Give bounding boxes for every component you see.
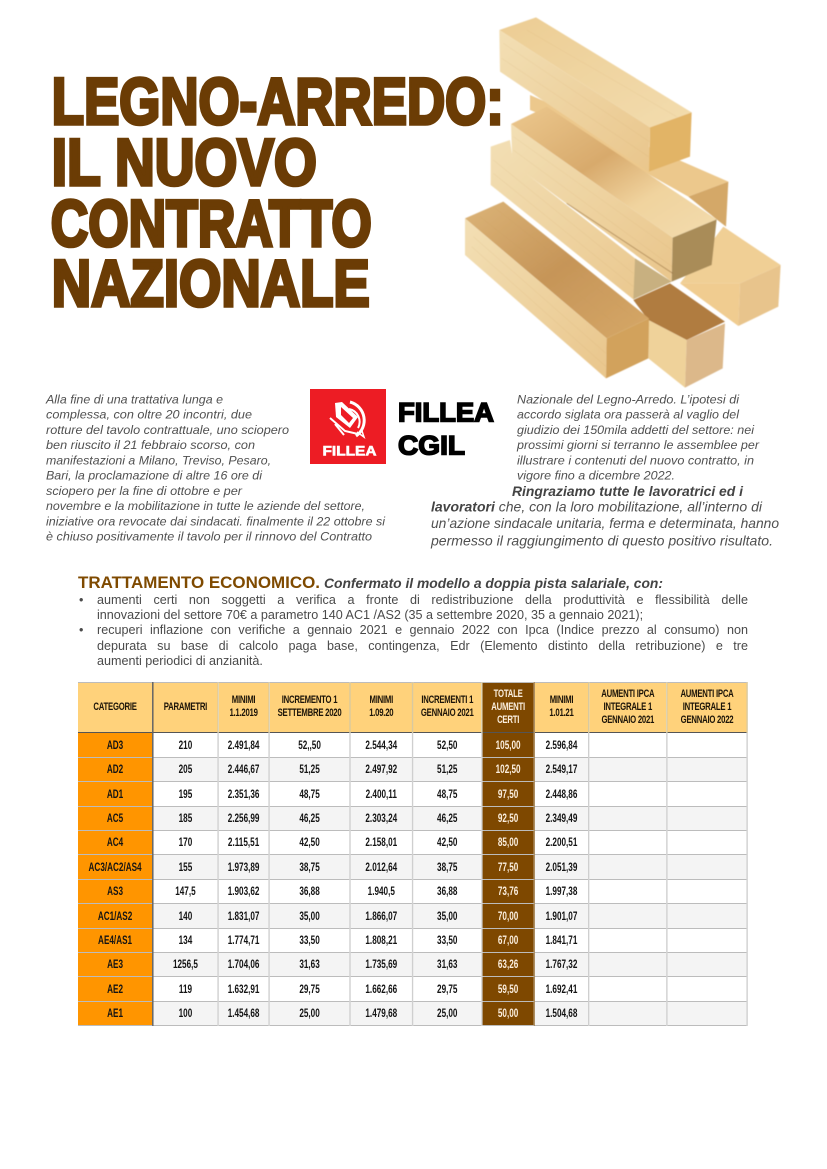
bullet list: innovazioni del settore 70€ a parametro 140 AC1 /AS2 (35 a settembre 2020, 35 a gennaio 2021);: [97, 608, 643, 622]
intro text: right column: lavoratori che, con la loro mobilitazione, all’interno di: [431, 500, 763, 515]
row AC5: 185: [179, 811, 192, 825]
row AS3: 1.903,62: [228, 884, 259, 898]
row AC5: 2.256,99: [228, 811, 259, 825]
row AE2: 59,50: [498, 982, 518, 996]
row AE4/AS1: [78, 929, 578, 952]
row AD3: 2.544,34: [365, 738, 397, 752]
row AC5: 2.349,49: [546, 811, 577, 825]
table header: GENNAIO 2021: [421, 707, 474, 719]
table header: CATEGORIE: [93, 700, 137, 712]
row AD2: 51,25: [299, 762, 320, 776]
row AC4: 170: [179, 835, 192, 849]
table header: MINIMI: [232, 694, 255, 706]
row AC4: 2.158,01: [365, 835, 397, 849]
intro text: right column: accordo siglata ora passerà al vaglio del: [517, 408, 739, 422]
intro text: right column: [430, 393, 779, 548]
table header: PARAMETRI: [164, 700, 207, 712]
row AC1/AS2: AC1/AS2: [98, 908, 132, 922]
title: [51, 64, 504, 320]
intro text: left column: iniziative ora revocate dai sindacati. finalmente il 22 ottobre si: [46, 515, 385, 528]
row AD1: 2.351,36: [228, 786, 259, 800]
row AE3: 31,63: [437, 957, 457, 971]
row AE3: 31,63: [299, 957, 320, 971]
row AC3/AC2/AS4: [78, 855, 746, 879]
row AC4: 85,00: [498, 835, 518, 849]
bullet list: •: [79, 623, 83, 637]
table header: 1.09.20: [369, 707, 393, 719]
row AS3: 36,88: [299, 884, 320, 898]
row AC4: AC4: [107, 835, 123, 849]
logo wordmark: [398, 398, 494, 460]
row AE1: 1.479,68: [365, 1006, 397, 1020]
table header: SETTEMBRE 2020: [278, 707, 341, 719]
intro text: right column: giudizio dei 150mila addetti del settore: nei: [517, 424, 754, 437]
row AE1: 25,00: [437, 1006, 457, 1020]
logo emblem: [330, 402, 364, 437]
row AE1: [78, 1002, 746, 1025]
row AD3: 2.491,84: [228, 738, 259, 752]
row AD3: 210: [179, 738, 192, 752]
row AD1: 2.448,86: [546, 786, 577, 800]
row AD2: 205: [179, 762, 192, 776]
table header: MINIMI: [550, 694, 573, 706]
row AC1/AS2: 70,00: [498, 908, 518, 922]
row AD1: 97,50: [498, 786, 518, 800]
row AC3/AC2/AS4: 155: [179, 860, 192, 874]
table header: [78, 683, 746, 1025]
row AD3: 2.596,84: [546, 738, 577, 752]
table header: MINIMI: [370, 694, 393, 706]
row AE3: 1.704,06: [228, 957, 259, 971]
intro text: left column: ben riuscito il 21 febbraio scorso, con: [46, 439, 255, 452]
bullet list: depurata su base di calcolo paga base, contingenza, Edr (Elemento distinto della retribuzione) e tre: [97, 638, 748, 652]
row AD1: 48,75: [299, 786, 320, 800]
row AE2: 119: [179, 982, 192, 996]
table header: INCREMENTO 1: [282, 694, 337, 706]
row AE2: 1.632,91: [228, 982, 259, 996]
row AE3: 1256,5: [173, 957, 198, 971]
intro text: left column: Alla fine di una trattativa lunga e: [45, 393, 224, 406]
row AE1: 1.504,68: [546, 1006, 577, 1020]
logo label in square: FILLEA: [322, 442, 376, 458]
row AC3/AC2/AS4: AC3/AC2/AS4: [89, 860, 142, 874]
row AD2: 2.549,17: [546, 762, 577, 776]
intro text: right column: Ringraziamo tutte le lavoratrici ed i: [512, 484, 744, 499]
row AC5: 92,50: [498, 811, 518, 825]
logo: Fillea CGIL: [310, 389, 494, 464]
row AE3: AE3: [107, 957, 123, 971]
row AE2: [78, 977, 578, 1001]
section heading: Trattamento economico: TRATTAMENTO ECONOMICO.: [78, 574, 320, 592]
row AE4/AS1: 1.841,71: [546, 933, 577, 947]
intro text: right column: un’azione sindacale unitaria, ferma e determinata, hanno: [431, 516, 779, 531]
row AE3: 1.767,32: [546, 957, 577, 971]
row AC3/AC2/AS4: 1.973,89: [228, 860, 259, 874]
intro text: right column: Nazionale del Legno-Arredo. L’ipotesi di: [517, 393, 739, 406]
row AE2: 1.692,41: [546, 982, 577, 996]
intro text: left column: sciopero per la fine di ottobre e per: [46, 485, 243, 498]
row AD1: AD1: [107, 786, 123, 800]
row AD3: [78, 733, 578, 757]
row AC1/AS2: 35,00: [437, 908, 457, 922]
row AE2: 1.662,66: [365, 982, 397, 996]
intro text: left column: è chiuso positivamente il tavolo per il rinnovo del Contratto: [46, 531, 373, 544]
table header: AUMENTI IPCA: [680, 688, 734, 700]
row AD1: 2.400,11: [366, 786, 397, 800]
row AE1: 1.454,68: [228, 1006, 259, 1020]
section heading: Trattamento economico: [78, 574, 663, 592]
title: CONTRATTO: [51, 186, 372, 260]
row AD3: AD3: [107, 738, 123, 752]
row AE2: 29,75: [437, 982, 457, 996]
row AC5: 46,25: [299, 811, 320, 825]
row AS3: 73,76: [498, 884, 518, 898]
table header: INTEGRALE 1: [683, 700, 731, 712]
table header: 1.1.2019: [229, 707, 258, 719]
section heading: Trattamento economico: Confermato il modello a doppia pista salariale, con:: [324, 575, 663, 591]
row AD2: [78, 758, 746, 781]
title: NAZIONALE: [52, 246, 370, 320]
row AE1: 25,00: [299, 1006, 320, 1020]
row AC4: 42,50: [299, 835, 320, 849]
row AD2: 2.446,67: [228, 762, 259, 776]
row AE2: AE2: [107, 982, 123, 996]
row AC1/AS2: 140: [179, 908, 192, 922]
table header: INCREMENTI 1: [421, 694, 473, 706]
title: LEGNO-ARREDO:: [52, 64, 504, 138]
intro text: left column: Bari, la proclamazione di altre 16 ore di: [46, 470, 262, 482]
row AE3: 1.735,69: [365, 957, 397, 971]
row AE4/AS1: 67,00: [498, 933, 518, 947]
intro text: left column: [45, 393, 386, 544]
row AC5: [78, 807, 746, 830]
row AD1: 195: [179, 786, 192, 800]
intro text: left column: rotture del tavolo contrattuale, uno sciopero: [46, 424, 290, 437]
row AD2: 2.497,92: [365, 762, 397, 776]
table header: AUMENTI: [491, 700, 525, 712]
row AC1/AS2: 1.831,07: [228, 908, 259, 922]
intro text: right column: illustrare i contenuti del nuovo contratto, in: [517, 454, 754, 467]
row AS3: [78, 880, 578, 903]
row AD3: 105,00: [496, 738, 521, 752]
logo red square: [310, 389, 386, 464]
row AC5: AC5: [107, 811, 123, 825]
intro text: right column: prossimi giorni si terranno le assemblee per: [516, 439, 760, 452]
row AE4/AS1: 134: [179, 933, 192, 947]
row AE3: 63,26: [498, 957, 518, 971]
row AD2: 51,25: [437, 762, 457, 776]
row AD3: 52,,50: [298, 738, 321, 752]
table header: AUMENTI IPCA: [601, 688, 654, 700]
logo wordmark: CGIL: [398, 430, 465, 460]
row AE2: 29,75: [299, 982, 320, 996]
row AC4: 2.200,51: [546, 835, 577, 849]
row AC1/AS2: 35,00: [299, 908, 320, 922]
bullet list: [79, 593, 748, 668]
table header: CERTI: [497, 714, 519, 726]
bullet list: aumenti certi non soggetti a verifica a fronte di redistribuzione della produttività e flessibilità delle: [97, 593, 748, 607]
logo wordmark: FILLEA: [398, 398, 494, 428]
row AC3/AC2/AS4: 77,50: [498, 860, 518, 874]
row AE4/AS1: 1.808,21: [365, 933, 397, 947]
row AC1/AS2: 1.901,07: [546, 908, 577, 922]
row AS3: 1.997,38: [546, 884, 577, 898]
row AE1: 50,00: [498, 1006, 518, 1020]
row AC1/AS2: [78, 904, 746, 928]
row AD2: 102,50: [496, 762, 521, 776]
bullet list: recuperi inflazione con verifiche a gennaio 2021 e gennaio 2022 con Ipca (Indice prezzo al consumo) non: [97, 623, 748, 637]
intro text: right column: permesso il raggiungimento di questo positivo risultato.: [430, 534, 773, 548]
intro text: right column: vigore fino a dicembre 2022.: [517, 470, 675, 482]
table: salary minimums by category: [78, 682, 748, 1026]
row AC3/AC2/AS4: 2.012,64: [365, 860, 397, 874]
row AS3: 36,88: [437, 884, 457, 898]
row AC4: 2.115,51: [228, 835, 259, 849]
row AD1: [78, 782, 578, 806]
row AE4/AS1: 33,50: [299, 933, 320, 947]
row AE4/AS1: 1.774,71: [228, 933, 259, 947]
row AC5: 2.303,24: [365, 811, 397, 825]
intro text: left column: complessa, con oltre 20 incontri, due: [46, 408, 253, 422]
row AS3: AS3: [107, 884, 123, 898]
table header: GENNAIO 2022: [681, 714, 733, 726]
intro text: left column: manifestazioni a Milano, Treviso, Pesaro,: [46, 454, 271, 467]
row AE4/AS1: AE4/AS1: [98, 933, 132, 947]
bullet list: aumenti periodici di anzianità.: [97, 654, 263, 668]
row AC3/AC2/AS4: 38,75: [299, 860, 320, 874]
row AC3/AC2/AS4: 38,75: [437, 860, 457, 874]
bullet list: •: [79, 593, 83, 607]
row AS3: 147,5: [175, 884, 196, 898]
table header: 1.01.21: [549, 707, 574, 719]
row AC4: [78, 831, 578, 854]
row AE1: 100: [179, 1006, 192, 1020]
row AE1: AE1: [107, 1006, 123, 1020]
title: IL NUOVO: [52, 125, 317, 199]
table header: TOTALE: [494, 688, 523, 700]
row AC4: 42,50: [437, 835, 457, 849]
table header: GENNAIO 2021: [601, 714, 654, 726]
image: stacked wooden beams: [464, 17, 782, 388]
intro text: left column: novembre e la mobilitazione in tutte le aziende del settore,: [46, 500, 365, 513]
row AD1: 48,75: [437, 786, 457, 800]
row AE3: [78, 953, 746, 976]
row AE4/AS1: 33,50: [437, 933, 457, 947]
row AC3/AC2/AS4: 2.051,39: [546, 860, 577, 874]
row AS3: 1.940,5: [368, 884, 395, 898]
row AC1/AS2: 1.866,07: [365, 908, 397, 922]
row AC5: 46,25: [437, 811, 457, 825]
table header: INTEGRALE 1: [603, 700, 652, 712]
row AD3: 52,50: [437, 738, 457, 752]
row AD2: AD2: [107, 762, 123, 776]
